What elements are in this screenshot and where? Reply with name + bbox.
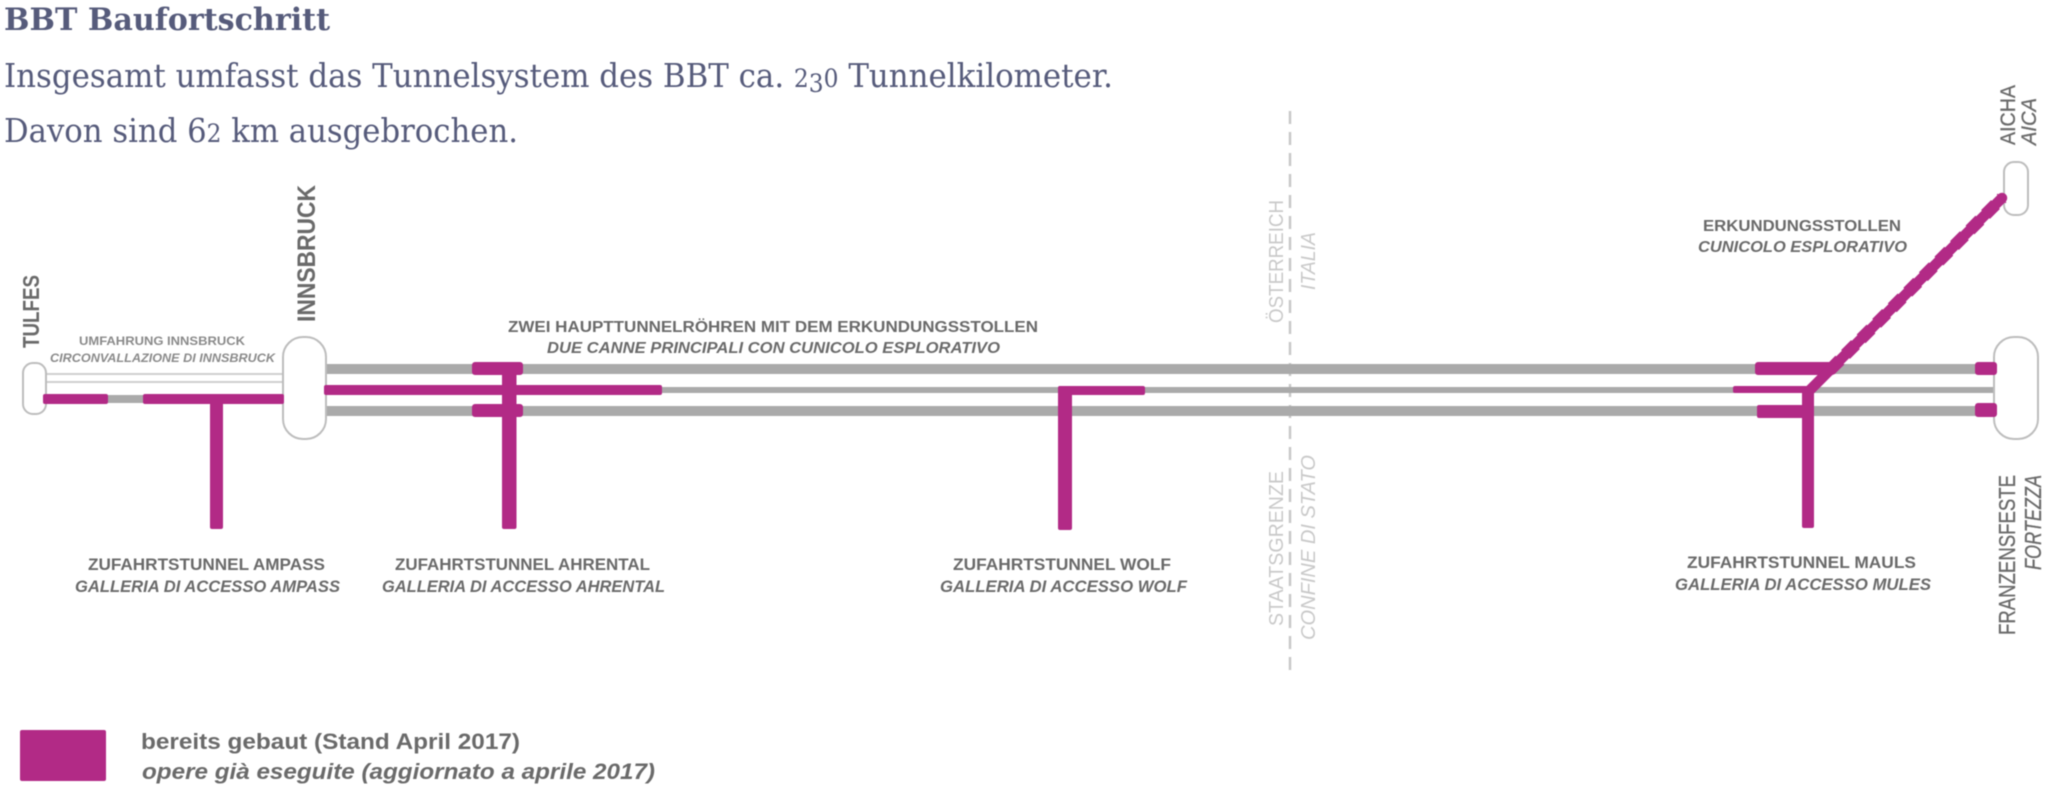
station: Franzensfeste bbox=[1994, 337, 2038, 439]
intro line 1: 3 bbox=[809, 69, 824, 98]
legend text German: bereits gebaut (Stand April 2017) bbox=[141, 729, 520, 754]
station: Tulfes bbox=[23, 363, 46, 414]
label: Mauls: ZUFAHRTSTUNNEL MAULS bbox=[1687, 553, 1916, 572]
Innsbruck bypass thin line 1 bbox=[45, 373, 283, 375]
label: exploratory tunnel bbox=[1698, 218, 1908, 256]
Innsbruck bypass thick line gap bbox=[108, 395, 144, 403]
built: Ahrental access tunnel bbox=[502, 368, 516, 529]
title: BBT Baufortschritt bbox=[4, 2, 331, 38]
built: Mauls access tunnel bbox=[1802, 387, 1814, 528]
main tube north bbox=[326, 364, 1994, 374]
label: Ampass: GALLERIA DI ACCESSO AMPASS bbox=[75, 577, 341, 596]
built: Ahrental north tube bbox=[472, 362, 523, 375]
label: main tubes bbox=[508, 317, 1038, 357]
intro line 1: 0 bbox=[824, 64, 839, 93]
built: Wolf exploratory tunnel bbox=[1058, 386, 1145, 395]
label: Aicha: AICHA bbox=[1997, 85, 2020, 145]
label: Wolf: ZUFAHRTSTUNNEL WOLF bbox=[953, 555, 1171, 574]
legend swatch bbox=[20, 730, 106, 781]
legend bbox=[20, 729, 655, 784]
label: Italia: ITALIA bbox=[1298, 232, 1320, 290]
label: bypass bbox=[50, 334, 276, 365]
label: Ampass bbox=[75, 555, 341, 596]
label: bypass: CIRCONVALLAZIONE DI INNSBRUCK bbox=[50, 351, 276, 365]
Innsbruck bypass thin line 2 bbox=[45, 381, 283, 383]
built: Mauls exploratory tunnel bbox=[1733, 386, 1815, 393]
label: Wolf bbox=[940, 555, 1188, 596]
label: bypass: UMFAHRUNG INNSBRUCK bbox=[79, 334, 245, 348]
diagonal bumps bbox=[1830, 198, 2002, 370]
built: bypass segment bbox=[143, 394, 284, 404]
label: Wolf: GALLERIA DI ACCESSO WOLF bbox=[940, 577, 1188, 596]
label: Aica: AICA bbox=[2018, 98, 2041, 147]
built: Franzensfeste south stub bbox=[1975, 403, 1997, 417]
label: Ampass: ZUFAHRTSTUNNEL AMPASS bbox=[88, 555, 325, 574]
label: Mauls bbox=[1675, 553, 1932, 594]
label: Mauls: GALLERIA DI ACCESSO MULES bbox=[1675, 575, 1932, 594]
intro line 1: Insgesamt umfasst das Tunnelsystem des BBT ca. 2 bbox=[4, 56, 838, 95]
built: Wolf access tunnel bbox=[1058, 386, 1072, 530]
state border dashed line bbox=[1289, 111, 1291, 671]
label: Confine di stato: CONFINE DI STATO bbox=[1298, 455, 1320, 640]
station: Innsbruck bbox=[283, 337, 326, 439]
intro text bbox=[4, 56, 1113, 150]
station boxes bbox=[23, 162, 2038, 439]
station labels bbox=[18, 85, 2046, 635]
built: exploratory tunnel to Aicha bbox=[1809, 198, 2002, 391]
label: Ahrental: GALLERIA DI ACCESSO AHRENTAL bbox=[382, 577, 665, 596]
intro line 2: Davon sind 62 km ausgebrochen. bbox=[4, 111, 518, 150]
label: main tubes: DUE CANNE PRINCIPALI CON CUNICOLO ESPLORATIVO bbox=[547, 340, 1001, 357]
exploratory tunnel bbox=[326, 387, 1994, 393]
main tube south bbox=[326, 406, 1994, 416]
station: Aicha bbox=[2004, 162, 2028, 215]
label: exploratory tunnel: ERKUNDUNGSSTOLLEN bbox=[1703, 218, 1901, 235]
built: Franzensfeste north stub bbox=[1975, 362, 1997, 375]
label: Ahrental: ZUFAHRTSTUNNEL AHRENTAL bbox=[395, 555, 650, 574]
magenta built sections bbox=[43, 198, 2002, 530]
label: exploratory tunnel: CUNICOLO ESPLORATIVO bbox=[1698, 239, 1908, 256]
gray planned tunnels bbox=[45, 364, 1994, 416]
tunnel labels bbox=[50, 218, 1932, 596]
label: Franzensfeste: FRANZENSFESTE bbox=[1994, 475, 2020, 635]
label: Ahrental bbox=[382, 555, 665, 596]
built: Mauls north tube bbox=[1755, 362, 1835, 375]
label: Österreich: ÖSTERREICH bbox=[1266, 200, 1288, 323]
built: Ampass access tunnel bbox=[210, 394, 223, 529]
label: Staatsgrenze: STAATSGRENZE bbox=[1266, 471, 1288, 626]
built: Ahrental south tube bbox=[472, 404, 523, 417]
diagonal line bbox=[1809, 198, 2002, 391]
label: Innsbruck: INNSBRUCK bbox=[293, 185, 321, 322]
built: Mauls south tube bbox=[1757, 405, 1809, 418]
legend text Italian: opere già eseguite (aggiornato a aprile 2017) bbox=[142, 759, 655, 784]
border labels bbox=[1266, 200, 1320, 640]
built: Tulfes segment bbox=[43, 394, 108, 404]
label: main tubes: ZWEI HAUPTTUNNELRÖHREN MIT DEM ERKUNDUNGSSTOLLEN bbox=[508, 317, 1038, 336]
intro line 1: Tunnelkilometer. bbox=[849, 56, 1132, 95]
built: Innsbruck exploratory tunnel bbox=[324, 385, 662, 395]
label: Fortezza: FORTEZZA bbox=[2020, 475, 2046, 570]
label: Tulfes: TULFES bbox=[18, 275, 44, 348]
